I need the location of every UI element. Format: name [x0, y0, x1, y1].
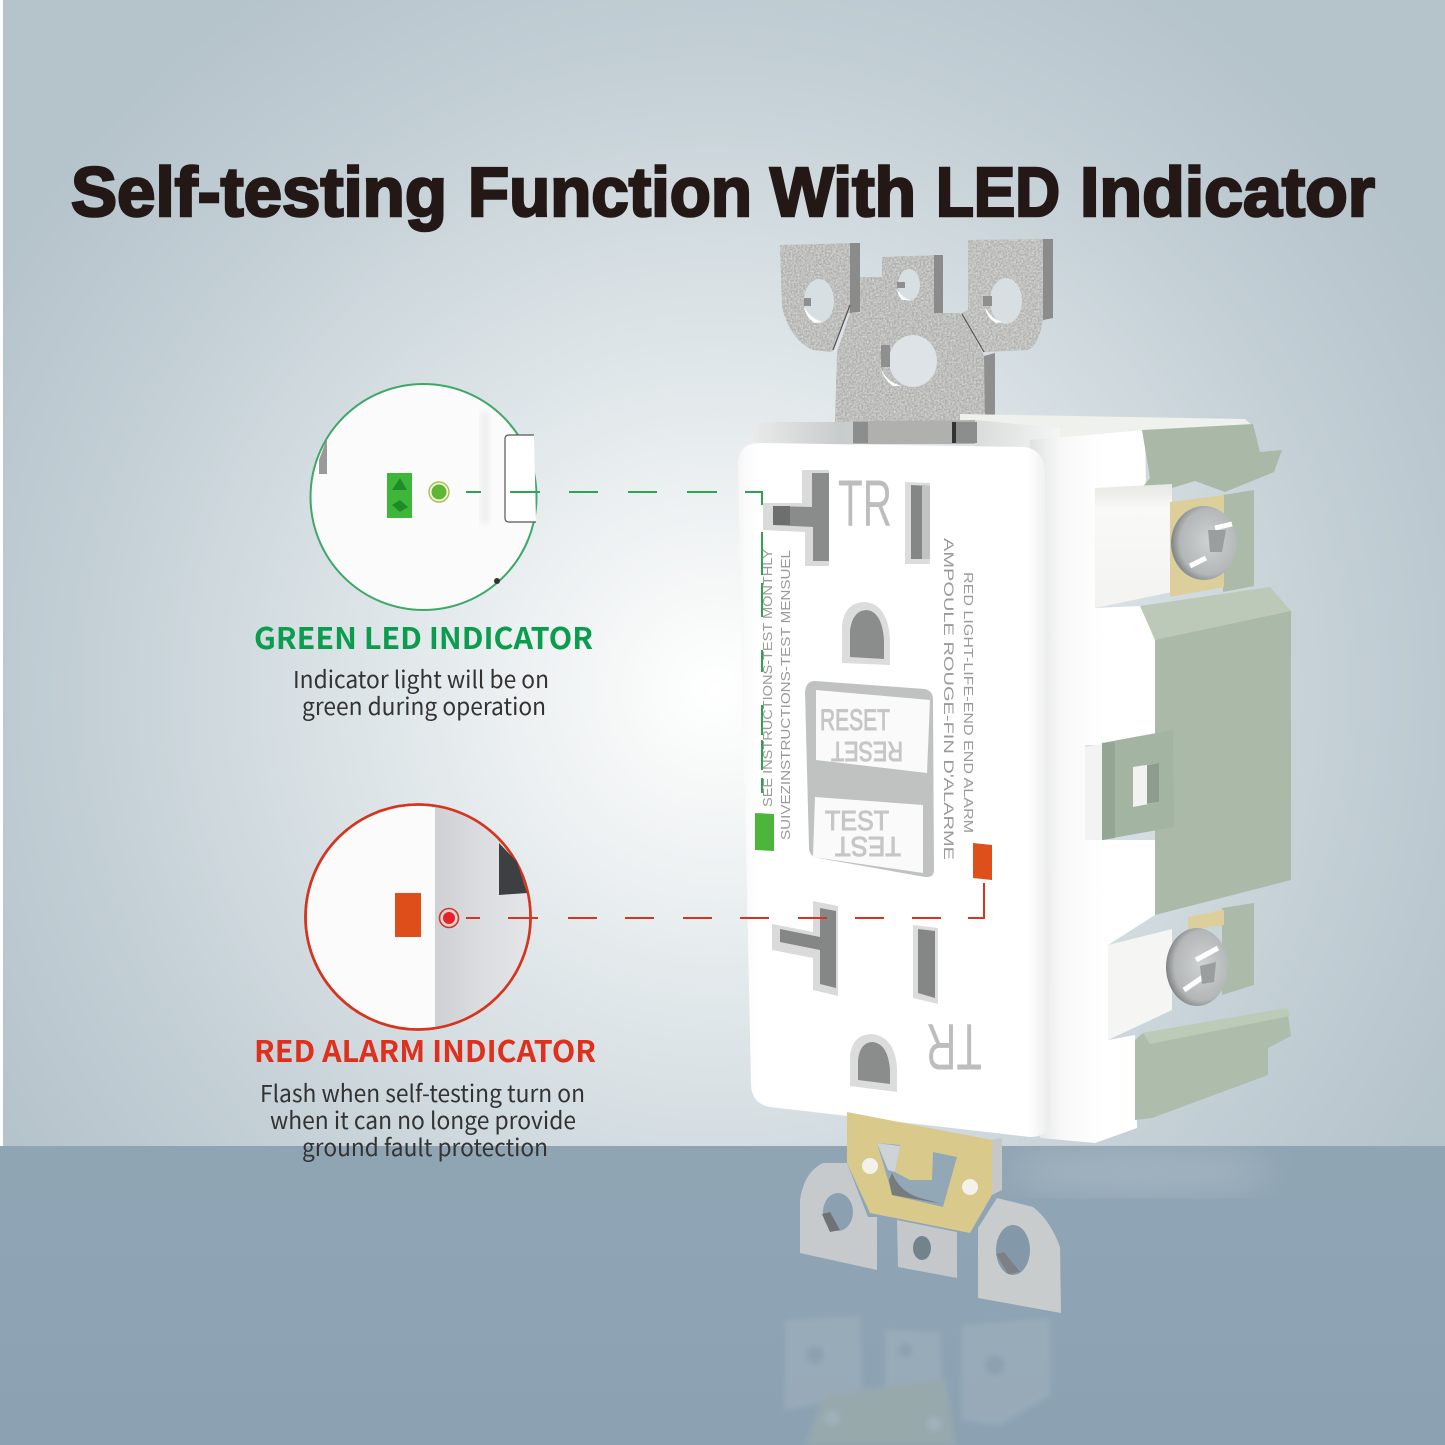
upper screw [1171, 506, 1237, 580]
reset label: RESET [820, 704, 890, 737]
outlet rear body [745, 414, 1292, 1143]
lower TR mark: TR [926, 1010, 982, 1084]
lower neutral slot [913, 925, 938, 1004]
left ear hole [822, 1193, 853, 1232]
corner mark [494, 578, 500, 584]
red LED close-up [395, 893, 421, 937]
top ground slot [842, 602, 890, 665]
test button [813, 797, 923, 873]
right ear [978, 1198, 1061, 1313]
middle ear hole [913, 1236, 931, 1260]
white side body [1030, 430, 1155, 1143]
small hole [897, 269, 920, 301]
tab shaded side [1102, 742, 1115, 840]
left ear hole [804, 279, 834, 323]
plate face [738, 443, 1050, 1137]
main green block [1155, 611, 1291, 915]
left vertical label: SEE INSTRUCTIONS-TEST MONTHLY [760, 549, 775, 807]
lower ground slot [850, 1034, 897, 1092]
upper rear green [1223, 490, 1254, 592]
floor [0, 1146, 1445, 1445]
red body text [260, 1075, 585, 1163]
floor shadow glow [1010, 1150, 1270, 1194]
large hole [881, 335, 937, 387]
test label: TEST [825, 805, 889, 836]
gray slot corner [319, 438, 327, 474]
upper white insert [1095, 484, 1172, 608]
lower white insert [1108, 929, 1172, 1040]
bottom mounting bracket [800, 1112, 1061, 1313]
top white strip [960, 414, 1255, 440]
title: With [770, 153, 916, 231]
shelf behind plate [745, 420, 1060, 450]
lower hot slot [772, 901, 838, 996]
cutout highlight [877, 1143, 900, 1172]
green dashed leader [466, 492, 762, 793]
top hot slot [763, 470, 829, 566]
left vertical label french: SUIVEZINSTRUCTIONS-TEST MENSUEL [778, 550, 793, 840]
brass side edge [992, 1138, 1002, 1195]
centre right edge [984, 353, 995, 422]
lower rear green [1222, 903, 1254, 995]
lower screw [1166, 928, 1228, 1006]
red LED on plate [973, 843, 992, 880]
red body text: Flash when self-testing turn on [260, 1075, 585, 1109]
circle outline over shade [306, 804, 530, 1030]
green body text: Indicator light will be on [293, 661, 549, 695]
cutout metal edge [889, 1173, 943, 1204]
red target ring [440, 908, 458, 928]
green zoom circle [310, 384, 536, 610]
shaded vertical band [480, 412, 490, 524]
title: LED [936, 153, 1060, 231]
reset label inverted: RESET [831, 736, 903, 767]
lower brass plate [1188, 910, 1224, 930]
top TR mark: TR [838, 466, 892, 540]
brass plate [847, 1112, 992, 1233]
red body text: ground fault protection [302, 1129, 548, 1163]
right ear hole [996, 1225, 1030, 1275]
brass rivet right [962, 1179, 978, 1195]
red body text: when it can no longe provide [270, 1102, 576, 1136]
reset and test button frame [805, 681, 934, 877]
bracket tab over shelf [853, 420, 977, 444]
lower rail highlight [1143, 1008, 1290, 1044]
right vertical label: RED LIGHT-LIFE-END END ALARM [961, 572, 976, 833]
green heading: GREEN LED INDICATOR [254, 614, 593, 658]
green body text: green during operation [302, 688, 546, 722]
dark slot corner [499, 843, 527, 895]
brass cutout [877, 1143, 957, 1207]
title [71, 153, 1375, 231]
right ear hole [983, 278, 1022, 324]
test label inverted: TEST [835, 831, 901, 862]
green LED close-up [387, 473, 412, 518]
tab white strip [1085, 744, 1102, 840]
green target ring [429, 482, 449, 502]
title: Self-testing [71, 153, 447, 231]
green LED on plate [755, 813, 774, 851]
green callout [254, 384, 762, 793]
red dashed leader [466, 883, 984, 918]
top mounting bracket [780, 239, 1053, 422]
main green block top [1140, 587, 1292, 640]
red callout [254, 804, 984, 1163]
lower green rail [1135, 1008, 1291, 1120]
button outline [505, 435, 536, 522]
top green rail [1132, 424, 1282, 500]
title: Indicator [1080, 153, 1375, 231]
top neutral slot [905, 482, 930, 564]
red zoom circle [306, 804, 530, 1030]
seam lines [833, 305, 984, 352]
title: Function [468, 153, 752, 231]
left ear edge [850, 243, 860, 313]
tab hole [1133, 763, 1159, 807]
side tab [1102, 730, 1174, 840]
bracket plates [780, 239, 1053, 422]
left ear [800, 1163, 877, 1270]
front plate [738, 420, 1050, 1137]
right ear edge [1043, 239, 1053, 320]
reset button [816, 690, 930, 773]
centre ear edge [934, 255, 943, 313]
right vertical label french: AMPOULE ROUGE-FIN D'ALARME [941, 538, 956, 860]
red heading: RED ALARM INDICATOR [254, 1027, 596, 1071]
floor reflection of bottom bracket [785, 1316, 1050, 1445]
background wall [3, 0, 1445, 1147]
middle ear [897, 1220, 957, 1278]
green body text [293, 661, 549, 722]
upper brass plate [1170, 495, 1224, 597]
tab hole inner [1147, 763, 1159, 804]
green target dot [430, 484, 448, 500]
brass rivet left [862, 1158, 878, 1174]
shaded plate edge [435, 806, 530, 1028]
red target dot [443, 912, 455, 924]
